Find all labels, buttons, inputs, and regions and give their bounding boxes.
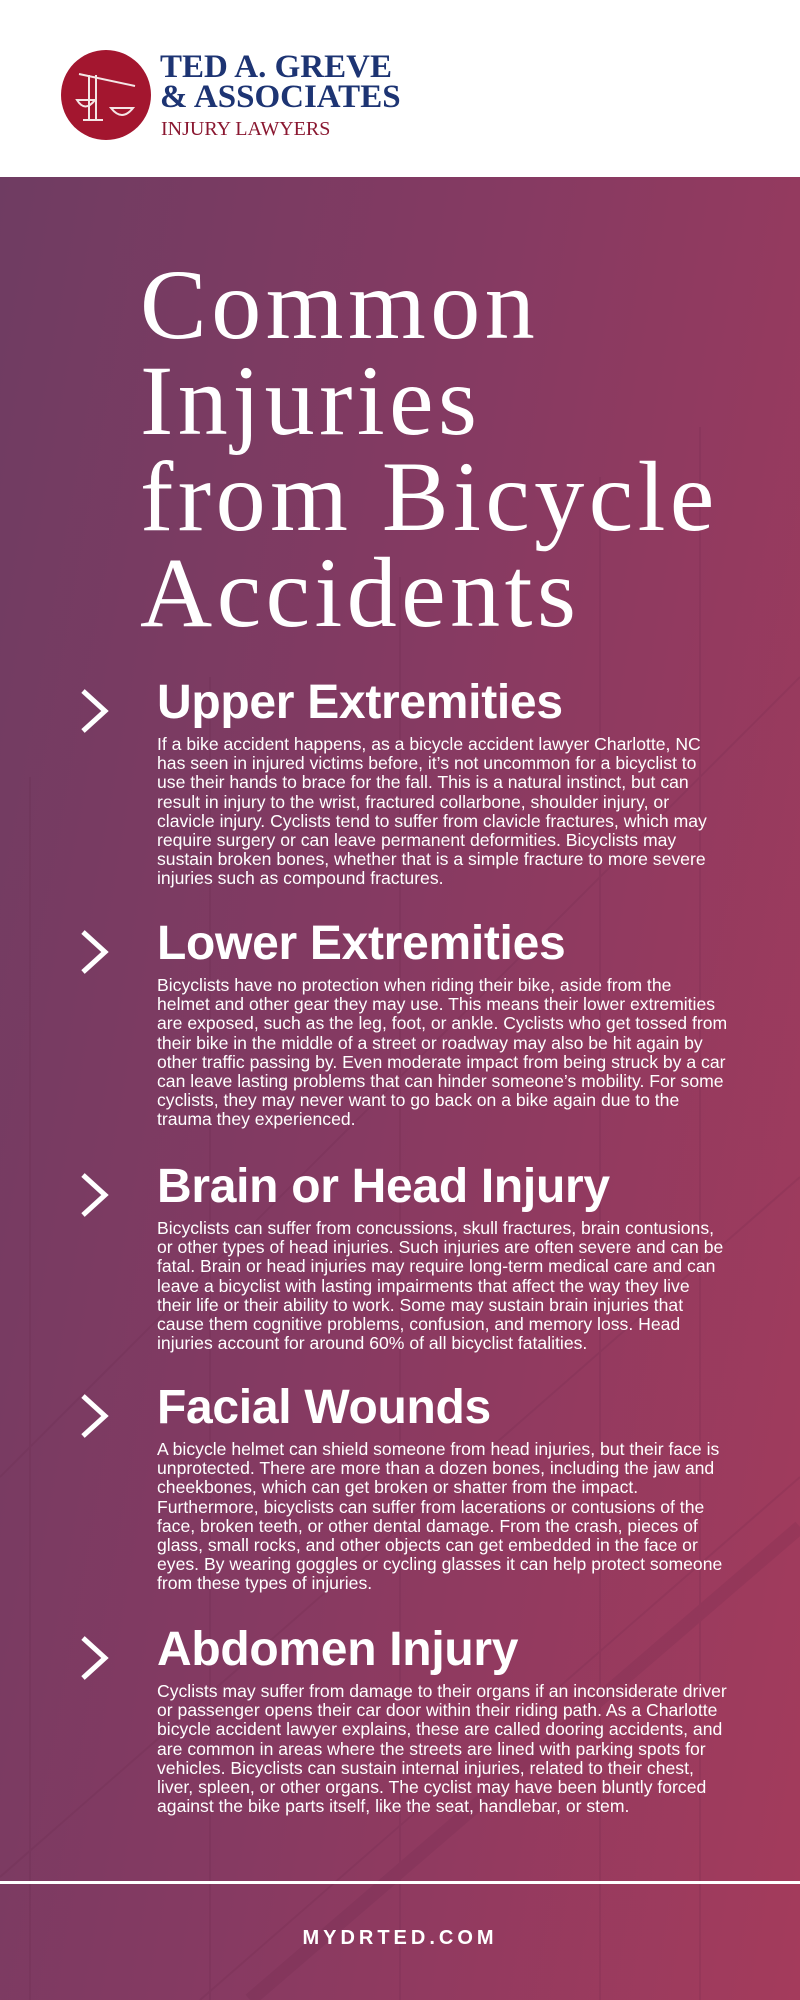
body text: their life or their ability to work. Some may sustain brain injuries that [157,1295,683,1315]
body text [157,1218,723,1353]
logo text: TED A. GREVE [160,49,392,85]
heading: Lower Extremities [157,917,565,970]
body text: cheekbones, which can get broken or shatter from the impact. [157,1477,638,1497]
body text: face, broken teeth, or other dental damage. From the crash, pieces of [157,1516,698,1536]
body text: unprotected. There are more than a dozen bones, including the jaw and [157,1458,714,1478]
body text [157,1439,722,1593]
body text: cyclists, they may never want to go back on a bike again due to the [157,1090,679,1110]
title: Injuries [140,345,481,456]
body text: or passenger opens their car door within their riding path. As a Charlotte [157,1700,717,1720]
logo text [160,49,401,115]
body text [157,734,707,888]
section: brain or head injury [81,1160,723,1353]
heading: Upper Extremities [157,676,563,729]
body text: Bicyclists can suffer from concussions, skull fractures, brain contusions, [157,1218,714,1238]
body text [157,975,727,1129]
icon: chevron [81,689,109,733]
icon: chevron [81,1636,109,1680]
body text: fatal. Brain or head injuries may require long-term medical care and can [157,1256,715,1276]
body text: cause them cognitive problems, confusion, and memory loss. Head [157,1314,680,1334]
heading: Brain or Head Injury [157,1160,610,1213]
section: lower extremities [81,917,727,1129]
icon: chevron [81,1173,109,1217]
heading: Abdomen Injury [157,1623,518,1676]
body text: against the bike parts itself, like the seat, handlebar, or stem. [157,1796,629,1816]
body text: sustain broken bones, whether that is a simple fracture to more severe [157,849,706,869]
body text: eyes. By wearing goggles or cycling glasses it can help protect someone [157,1554,722,1574]
body text: use their hands to brace for the fall. This is a natural instinct, but can [157,772,689,792]
body text: are exposed, such as the leg, foot, or ankle. Cyclists who get tossed from [157,1013,727,1033]
body text: injuries such as compound fractures. [157,868,444,888]
body text: vehicles. Bicyclists can sustain internal injuries, related to their chest, [157,1758,694,1778]
section: facial wounds [81,1381,722,1593]
body text: trauma they experienced. [157,1109,356,1129]
icon: chevron [81,1394,109,1438]
body text: liver, spleen, or other organs. The cyclist may have been bluntly forced [157,1777,706,1797]
body text: from these types of injuries. [157,1573,372,1593]
logo [61,49,401,140]
body text: result in injury to the wrist, fractured collarbone, shoulder injury, or [157,792,669,812]
section: upper extremities [81,676,707,888]
logo text: & ASSOCIATES [160,79,401,115]
title: Accidents [140,537,580,648]
body text: are common in areas where the streets are lined with parking spots for [157,1739,706,1759]
body text: Bicyclists have no protection when riding their bike, aside from the [157,975,671,995]
body text: their bike in the middle of a street or roadway may also be hit again by [157,1033,703,1053]
body text: Furthermore, bicyclists can suffer from lacerations or contusions of the [157,1497,704,1517]
logo: INJURY LAWYERS [161,118,330,140]
body text: injuries account for around 60% of all bicyclist fatalities. [157,1333,587,1353]
body text: glass, small rocks, and other objects can get embedded in the face or [157,1535,698,1555]
body text: require surgery or can leave permanent deformities. Bicyclists may [157,830,676,850]
title: Common [140,249,539,360]
body text: leave a bicyclist with lasting impairments that affect the way they live [157,1276,690,1296]
title [140,249,719,648]
body text: or other types of head injuries. Such injuries are often severe and can be [157,1237,723,1257]
body text: If a bike accident happens, as a bicycle accident lawyer Charlotte, NC [157,734,701,754]
icon: scales emblem [61,50,151,140]
body text: clavicle injury. Cyclists tend to suffer from clavicle fractures, which may [157,811,707,831]
body text: helmet and other gear they may use. This means their lower extremities [157,994,715,1014]
body text: bicycle accident lawyer explains, these are called dooring accidents, and [157,1719,722,1739]
body text: other traffic passing by. Even moderate impact from being struck by a car [157,1052,725,1072]
body text: has seen in injured victims before, it’s not uncommon for a bicyclist to [157,753,696,773]
body text: Cyclists may suffer from damage to their organs if an inconsiderate driver [157,1681,727,1701]
heading: Facial Wounds [157,1381,491,1434]
icon: chevron [81,930,109,974]
body text: can leave lasting problems that can hinder someone’s mobility. For some [157,1071,724,1091]
section: abdomen injury [81,1623,727,1816]
title: from Bicycle [140,441,719,552]
footer url: MYDRTED.COM [302,1927,498,1949]
body text [157,1681,727,1816]
body text: A bicycle helmet can shield someone from head injuries, but their face is [157,1439,719,1459]
